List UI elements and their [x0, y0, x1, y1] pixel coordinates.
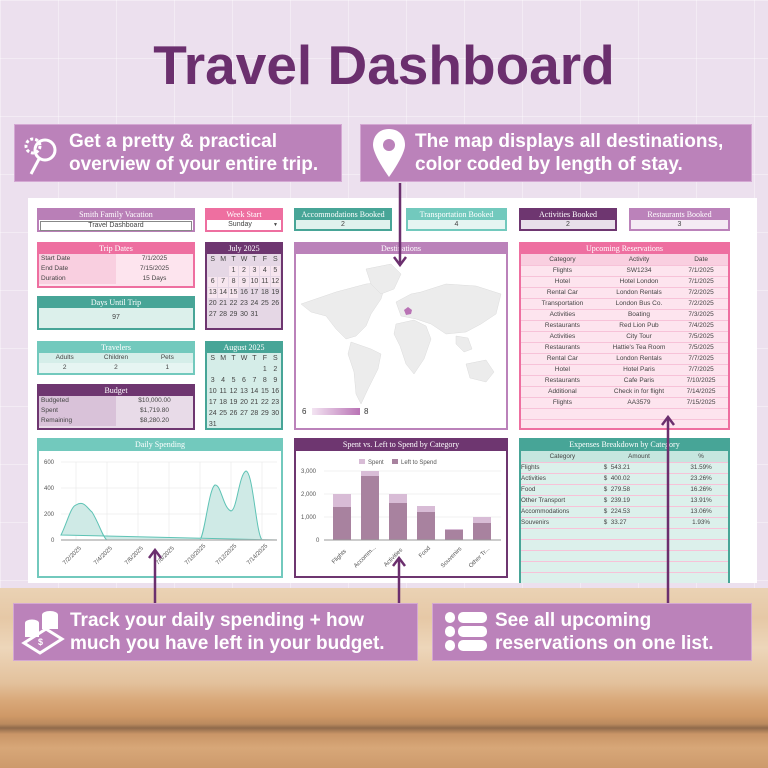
chart: Spent vs Left to Spend — [294, 438, 508, 578]
chart: Daily Spending — [37, 438, 283, 578]
title: Travel Dashboard — [153, 34, 615, 96]
calendar: July 2025: T — [252, 256, 257, 263]
calendar: August 2025: T — [231, 355, 236, 362]
calendar: August 2025: August 2025 — [223, 343, 265, 352]
panel: Days Until Trip — [37, 296, 195, 330]
calendar: July 2025: W — [241, 256, 247, 263]
chart: Daily Spending: 600 — [44, 460, 55, 466]
box: Accommodations Booked — [294, 208, 392, 231]
panel: Upcoming Reservations: Activities — [550, 333, 575, 340]
icon: money: $ — [38, 637, 43, 647]
panel: Upcoming Reservations: London Rentals — [616, 289, 662, 296]
calendar: July 2025: 8 — [232, 278, 236, 285]
calendar: August 2025: 9 — [273, 377, 277, 384]
icon: map pin — [373, 129, 405, 177]
panel: Upcoming Reservations: City Tour — [626, 333, 652, 340]
calendar: July 2025: 13 — [209, 289, 217, 296]
panel: Budget: Budgeted — [41, 397, 69, 404]
chart: Daily Spending: 7/10/2025 — [184, 543, 208, 566]
panel: Upcoming Reservations: Boating — [628, 311, 650, 318]
panel: Upcoming Reservations: Activities — [550, 311, 575, 318]
calendar: July 2025: S — [210, 256, 215, 263]
calendar: August 2025: 2 — [273, 366, 277, 373]
calendar: July 2025: 14 — [219, 289, 227, 296]
chart: Spent vs Left to Spend: Spent — [368, 460, 384, 466]
callout: daily spending: much you have left in your budget. — [70, 633, 385, 654]
panel: Upcoming Reservations: Hotel — [555, 278, 570, 285]
calendar: August 2025: 27 — [240, 410, 248, 417]
calendar: August 2025: 24 — [209, 410, 217, 417]
panel: Upcoming Reservations: Activity — [629, 256, 649, 263]
panel: Expenses Breakdown: 16.26% — [690, 486, 712, 493]
chart: Spent vs Left to Spend: 0 — [316, 538, 320, 544]
calendar: August 2025: 18 — [219, 399, 227, 406]
panel: Upcoming Reservations: Additional — [548, 388, 577, 395]
calendar: July 2025: S — [273, 256, 278, 263]
panel: Travelers: 2 — [114, 364, 118, 371]
box: Activities Booked: 2 — [566, 221, 570, 228]
box: Transportation Booked: Transportation Booked — [420, 210, 493, 219]
panel: Upcoming Reservations: Hotel Paris — [623, 366, 655, 373]
dashboard panel — [28, 198, 757, 583]
calendar: August 2025: 3 — [211, 377, 215, 384]
panel: Expenses Breakdown: Expenses Breakdown by Category — [569, 440, 680, 449]
calendar: July 2025: 2 — [242, 267, 246, 274]
calendar: July 2025: 25 — [261, 300, 269, 307]
chart: Daily Spending: 7/6/2025 — [124, 545, 145, 566]
calendar: July 2025: 28 — [219, 311, 227, 318]
map: 6 — [302, 407, 307, 416]
callout: overview — [14, 124, 342, 182]
calendar: August 2025: 26 — [230, 410, 237, 417]
calendar: August 2025: 31 — [209, 421, 217, 428]
chart: Spent vs Left to Spend: Spent vs. Left to Spend by Category — [343, 440, 459, 449]
calendar: August 2025: 22 — [261, 399, 269, 406]
panel: Expenses Breakdown: 13.06% — [690, 508, 712, 515]
callout: reservations — [432, 603, 752, 661]
calendar: July 2025: 23 — [240, 300, 248, 307]
panel: Travelers: 1 — [166, 364, 169, 371]
icon: magnifier gear — [24, 138, 56, 175]
box: Smith Family Vacation: Travel Dashboard — [88, 222, 144, 229]
calendar: July 2025: 12 — [271, 278, 279, 285]
panel: Upcoming Reservations: 7/3/2025 — [688, 311, 714, 318]
panel: Destinations map: Destinations — [381, 244, 421, 253]
calendar: August 2025: 1 — [263, 366, 267, 373]
arrow: map — [393, 183, 407, 267]
panel: Upcoming Reservations: 7/2/2025 — [688, 300, 714, 307]
chart: Spent vs Left to Spend: Souvenirs — [440, 546, 463, 569]
calendar: July 2025: 1 — [232, 267, 236, 274]
calendar: July 2025: 16 — [240, 289, 248, 296]
panel: Trip Dates: 15 Days — [143, 275, 166, 282]
panel: Upcoming Reservations: AA3579 — [627, 399, 651, 406]
chart: Daily Spending: 7/14/2025 — [246, 543, 270, 566]
calendar: August 2025: 13 — [240, 388, 248, 395]
callout: map: color coded by length of stay. — [415, 154, 683, 175]
panel: Upcoming Reservations: Flights — [553, 399, 572, 406]
panel: Upcoming Reservations: Red Lion Pub — [619, 322, 659, 329]
calendar: July 2025: 19 — [271, 289, 279, 296]
panel: Travelers: Children — [104, 354, 128, 361]
panel: Travelers — [37, 341, 195, 375]
box: Restaurants Booked: 3 — [678, 221, 681, 228]
calendar: July 2025: 11 — [261, 278, 268, 285]
calendar: August 2025: 29 — [261, 410, 269, 417]
box: Week Start — [205, 208, 283, 232]
chart: Spent vs Left to Spend: Other Tr... — [468, 546, 492, 569]
panel: Upcoming Reservations: London Bus Co. — [616, 300, 662, 307]
icon: money — [21, 611, 65, 655]
callout: overview: overview of your entire trip. — [69, 154, 318, 175]
chart: Daily Spending: 7/8/2025 — [155, 545, 176, 566]
panel: Budget: Budget — [104, 386, 128, 395]
chart: Daily Spending: 0 — [51, 538, 55, 544]
calendar: August 2025: 6 — [242, 377, 246, 384]
calendar: August 2025: 8 — [263, 377, 267, 384]
panel: Upcoming Reservations: 7/5/2025 — [688, 333, 714, 340]
panel: Expenses Breakdown — [519, 438, 730, 583]
calendar: August 2025: S — [210, 355, 215, 362]
panel: Expenses Breakdown: Souvenirs — [521, 519, 549, 526]
calendar: July 2025: 6 — [211, 278, 215, 285]
panel: Trip Dates: 7/15/2025 — [140, 265, 169, 272]
panel: Expenses Breakdown: 23.26% — [690, 475, 712, 482]
panel: Expenses Breakdown: 13.91% — [690, 497, 712, 504]
panel: Budget: $1,719.80 — [140, 407, 169, 414]
calendar: July 2025: 18 — [261, 289, 269, 296]
box: Transportation Booked: 4 — [455, 221, 458, 228]
panel: Upcoming Reservations: 7/4/2025 — [688, 322, 714, 329]
panel: Expenses Breakdown: 31.59% — [690, 464, 712, 471]
calendar: July 2025: 10 — [251, 278, 258, 285]
panel: Budget: Spent — [41, 407, 58, 414]
calendar: August 2025: W — [241, 355, 247, 362]
panel: Upcoming Reservations: 7/7/2025 — [688, 355, 714, 362]
chart: Daily Spending: 7/2/2025 — [62, 545, 83, 566]
panel: Days Until Trip: Days Until Trip — [91, 298, 141, 307]
box: Restaurants Booked: Restaurants Booked — [647, 210, 712, 219]
calendar: August 2025: 28 — [251, 410, 258, 417]
arrow: daily spending — [148, 548, 162, 603]
panel: Trip Dates: Trip Dates — [99, 244, 133, 253]
chart: Spent vs Left to Spend: Activities — [383, 547, 404, 568]
panel: Expenses Breakdown: $ 239.19 — [604, 497, 630, 504]
panel: Upcoming Reservations: Date — [694, 256, 708, 263]
panel: Upcoming Reservations: 7/7/2025 — [688, 366, 714, 373]
chart: Spent vs Left to Spend: Accomm... — [353, 545, 378, 569]
chart: Daily Spending: 200 — [44, 512, 55, 518]
panel: Upcoming Reservations: Restaurants — [545, 344, 580, 351]
calendar: August 2025: F — [263, 355, 267, 362]
calendar: July 2025: 21 — [219, 300, 227, 307]
calendar: August 2025: T — [252, 355, 257, 362]
calendar: July 2025: 29 — [230, 311, 237, 318]
box: Week Start: Sunday — [228, 221, 252, 228]
calendar: August 2025: 19 — [230, 399, 237, 406]
panel: Expenses Breakdown: $ 543.21 — [604, 464, 630, 471]
calendar: July 2025: M — [220, 256, 226, 263]
calendar: July 2025: 24 — [251, 300, 258, 307]
panel: Upcoming Reservations: Hattie's Tea Room — [613, 344, 665, 351]
callout: daily spending — [13, 603, 418, 661]
calendar: July 2025: July 2025 — [228, 244, 260, 253]
calendar: July 2025: 30 — [240, 311, 248, 318]
calendar: August 2025: 21 — [251, 399, 258, 406]
box: Week Start: ▼ — [273, 222, 278, 228]
calendar: July 2025: 4 — [263, 267, 267, 274]
panel: Budget: $10,000.00 — [138, 397, 171, 404]
panel: Days Until Trip: 97 — [112, 314, 120, 321]
calendar: August 2025: 11 — [219, 388, 227, 395]
calendar: August 2025: 10 — [209, 388, 217, 395]
calendar: July 2025 — [205, 242, 283, 330]
box: Smith Family Vacation: Smith Family Vacation — [79, 210, 153, 219]
calendar: July 2025: 7 — [221, 278, 225, 285]
calendar: July 2025: 27 — [209, 311, 217, 318]
box: Activities Booked: Activities Booked — [539, 210, 597, 219]
icon: list — [445, 612, 487, 651]
chart: Spent vs Left to Spend: 3,000 — [301, 469, 317, 475]
box: Accommodations Booked: 2 — [341, 221, 345, 228]
panel: Expenses Breakdown: Activities — [521, 475, 546, 482]
calendar: August 2025: 30 — [271, 410, 279, 417]
panel: Upcoming Reservations: Check in for flight — [614, 388, 664, 395]
calendar: July 2025: 15 — [230, 289, 237, 296]
panel: Expenses Breakdown: Flights — [521, 464, 540, 471]
callout: reservations: reservations on one list. — [495, 633, 714, 654]
panel: Expenses Breakdown: 1.93% — [692, 519, 710, 526]
panel: Upcoming Reservations: Rental Car — [547, 355, 578, 362]
box: Week Start: Week Start — [226, 210, 262, 219]
arrow: reservations — [661, 415, 675, 603]
box: Activities Booked — [519, 208, 617, 231]
panel: Upcoming Reservations: 7/10/2025 — [687, 377, 716, 384]
callout: map — [360, 124, 752, 182]
panel: Expenses Breakdown: Category — [550, 453, 575, 460]
callout: reservations: See all upcoming — [495, 610, 651, 631]
panel: Upcoming Reservations: Restaurants — [545, 322, 580, 329]
panel: Upcoming Reservations: Upcoming Reservations — [586, 244, 663, 253]
panel: Upcoming Reservations: 7/14/2025 — [687, 388, 716, 395]
panel: Upcoming Reservations: Flights — [553, 267, 572, 274]
panel: Travelers: Travelers — [101, 343, 131, 352]
panel: Travelers: Adults — [56, 354, 74, 361]
calendar: August 2025: 12 — [230, 388, 237, 395]
panel: Upcoming Reservations: Category — [549, 256, 576, 263]
panel: Upcoming Reservations: London Rentals — [616, 355, 662, 362]
panel: Upcoming Reservations: Hotel London — [620, 278, 658, 285]
calendar: August 2025: 16 — [271, 388, 279, 395]
calendar: July 2025: F — [263, 256, 267, 263]
calendar: July 2025: 5 — [273, 267, 277, 274]
map — [301, 264, 502, 416]
calendar: August 2025: 23 — [271, 399, 279, 406]
calendar: August 2025: S — [273, 355, 278, 362]
panel: Budget: $8,280.20 — [140, 417, 169, 424]
panel: Upcoming Reservations: Cafe Paris — [624, 377, 654, 384]
panel: Travelers: 2 — [63, 364, 66, 371]
calendar: August 2025: 20 — [240, 399, 248, 406]
panel: Upcoming Reservations: 7/2/2025 — [688, 289, 714, 296]
calendar: August 2025: 7 — [252, 377, 256, 384]
chart: Spent vs Left to Spend: 1,000 — [301, 515, 317, 521]
chart: Daily Spending: 7/4/2025 — [93, 545, 114, 566]
panel: Expenses Breakdown: Amount — [628, 453, 650, 460]
panel: Expenses Breakdown: $ 224.53 — [604, 508, 630, 515]
arrow: bar chart — [392, 556, 406, 603]
panel: Upcoming Reservations: Transportation — [542, 300, 583, 307]
chart: Daily Spending: Daily Spending — [135, 440, 185, 449]
calendar: August 2025: M — [220, 355, 226, 362]
panel: Expenses Breakdown: $ 400.02 — [604, 475, 630, 482]
panel: Upcoming Reservations: Hotel — [555, 366, 570, 373]
panel: Upcoming Reservations — [519, 242, 730, 430]
panel: Trip Dates: 7/1/2025 — [142, 255, 167, 262]
panel: Expenses Breakdown: Accommodations — [521, 508, 569, 515]
box: Restaurants Booked — [629, 208, 730, 231]
panel: Expenses Breakdown: $ 33.27 — [604, 519, 627, 526]
calendar: July 2025: 17 — [251, 289, 258, 296]
calendar: July 2025: 22 — [230, 300, 237, 307]
panel: Expenses Breakdown: $ 279.58 — [604, 486, 630, 493]
chart: Spent vs Left to Spend: Food — [418, 545, 432, 559]
panel: Trip Dates: Duration — [41, 275, 66, 282]
callout: map: The map displays all destinations, — [415, 131, 723, 152]
panel: Trip Dates: Start Date — [41, 255, 70, 262]
panel: Expenses Breakdown: Other Transport — [521, 497, 565, 504]
panel: Expenses Breakdown: % — [698, 453, 704, 460]
calendar: August 2025: 17 — [209, 399, 217, 406]
calendar: August 2025: 5 — [232, 377, 236, 384]
panel: Trip Dates: End Date — [41, 265, 68, 272]
calendar: July 2025: 31 — [251, 311, 258, 318]
box: Accommodations Booked: Accommodations Booked — [301, 210, 385, 219]
calendar: July 2025: 9 — [242, 278, 246, 285]
callout: daily spending: Track your daily spending + how — [70, 610, 364, 631]
calendar: July 2025: 26 — [271, 300, 279, 307]
map: 8 — [364, 407, 369, 416]
panel: Travelers: Pets — [161, 354, 174, 361]
calendar: August 2025: 15 — [261, 388, 269, 395]
chart: Daily Spending: 7/12/2025 — [215, 543, 239, 566]
panel: Trip Dates — [37, 242, 195, 288]
calendar: July 2025: 20 — [209, 300, 217, 307]
panel: Expenses Breakdown: Food — [521, 486, 535, 493]
chart: Spent vs Left to Spend: Left to Spend — [401, 460, 437, 466]
calendar: August 2025: 4 — [221, 377, 225, 384]
panel: Upcoming Reservations: 7/1/2025 — [688, 267, 714, 274]
panel: Upcoming Reservations: 7/1/2025 — [688, 278, 714, 285]
calendar: July 2025: 3 — [252, 267, 256, 274]
chart: Daily Spending: 400 — [44, 486, 55, 492]
calendar: August 2025 — [205, 341, 283, 430]
callout: overview: Get a pretty & practical — [69, 131, 277, 152]
calendar: August 2025: 25 — [219, 410, 227, 417]
calendar: August 2025: 14 — [251, 388, 258, 395]
panel: Budget — [37, 384, 195, 430]
panel: Upcoming Reservations: 7/5/2025 — [688, 344, 714, 351]
panel: Upcoming Reservations: Restaurants — [545, 377, 580, 384]
panel: Upcoming Reservations: SW1234 — [627, 267, 651, 274]
panel: Budget: Remaining — [41, 417, 72, 424]
panel: Upcoming Reservations: 7/15/2025 — [687, 399, 716, 406]
panel: Upcoming Reservations: Rental Car — [547, 289, 578, 296]
chart: Spent vs Left to Spend: 2,000 — [301, 492, 317, 498]
calendar: July 2025: T — [231, 256, 236, 263]
chart: Spent vs Left to Spend: Flights — [331, 549, 348, 565]
box: Smith Family Vacation — [37, 208, 195, 232]
box: Transportation Booked — [406, 208, 507, 231]
panel: Destinations map — [294, 242, 508, 430]
